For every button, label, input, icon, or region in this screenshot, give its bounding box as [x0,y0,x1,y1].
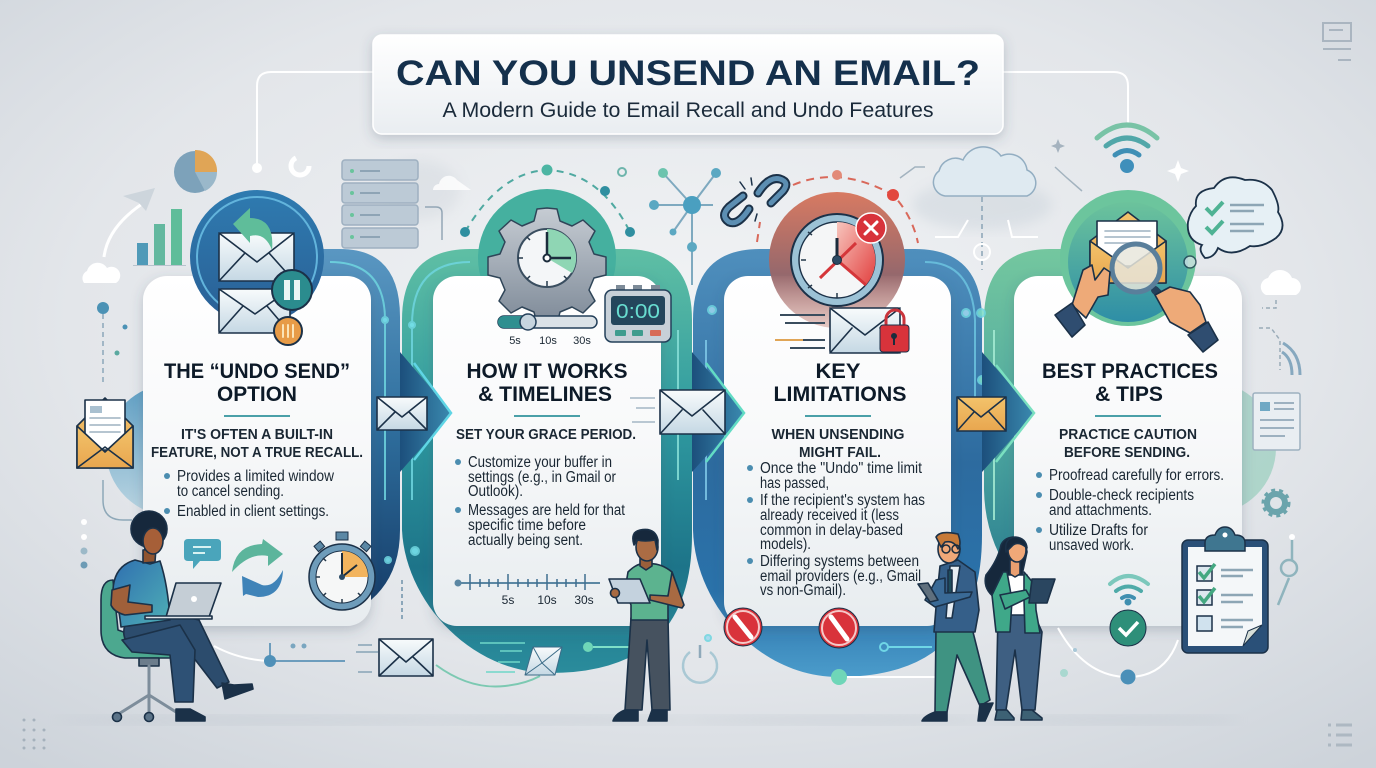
bullets card 2: Customize your buffer in [468,454,612,471]
bullets card 2 [455,454,626,549]
divider [805,415,871,417]
bullets card 4: Double-check recipients [1049,487,1194,504]
icon: dashed red arc [757,170,918,243]
icon circle: timeline gear backdrop [478,189,616,327]
bullets card 1: Provides a limited window [177,468,335,485]
subheading card 1: IT'S OFTEN A BUILT-IN [181,427,333,443]
panel: card 3 key limitations [724,276,951,626]
bullets card 3: email providers (e.g., Gmail [760,568,921,585]
arm [925,578,972,607]
timeline ruler: 10s [537,593,557,607]
decor: side wifi [1282,343,1300,375]
ribbon 2 [402,249,692,673]
decor: swirl ring [291,157,309,175]
person: seated with laptop [101,511,253,722]
person: standing with tablet [609,529,684,721]
subtitle: A Modern Guide to Email Recall and Undo Features [442,99,934,122]
decor: small cloud and bracket [425,176,471,240]
arm [650,572,684,608]
decor: right cloud [1259,270,1301,370]
head [938,535,960,563]
heading: how it works: & TIMELINES [478,383,612,406]
decor: power ring [683,645,717,683]
bullets card 2: settings (e.g., in Gmail or [468,469,616,486]
decor: wifi top right [1097,125,1157,173]
ribbon 1 [300,249,400,600]
bullets card 4: unsaved work. [1049,537,1134,554]
icon: stop sign center [819,608,859,648]
icon: digital timer: 0:00 [616,301,660,323]
decor: rocket with trail [104,188,155,257]
icon: clock with x [791,213,886,306]
timeline ruler: 5s [502,593,514,607]
divider [1095,415,1161,417]
icon: envelope under magnifier [1090,212,1175,310]
shoes [995,710,1042,720]
shoes [176,709,205,721]
title box [373,35,1003,134]
decor: bar chart [133,209,186,266]
tablet [609,579,650,603]
decor: node line right [1278,534,1297,605]
timeline ruler [454,574,600,607]
arrow 1 [400,352,452,472]
subheading card 4: PRACTICE CAUTION [1059,427,1197,443]
ground shadows [55,715,1240,725]
bullets card 3: Once the "Undo" time limit [760,460,923,477]
decor: cloud left [82,263,120,283]
neck [640,555,652,570]
icon: clipboard checklist [1182,527,1268,653]
icon: slider: 10s [539,335,557,347]
decor: cloud with pulse [900,147,1082,270]
decor: sparkles [1051,139,1189,182]
bullets card 4: and attachments. [1049,502,1152,519]
shirt and tie [946,566,960,618]
heading: key limitations: LIMITATIONS [774,383,906,406]
face [143,528,163,554]
person: man with phone [918,533,993,721]
ribbon: left halo [106,384,238,516]
divider [224,415,290,417]
connector lines from title [253,72,1128,172]
jacket [934,560,979,632]
jacket [992,572,1040,633]
icon: sync arrows [232,539,283,597]
decor: pie chart [174,150,217,193]
pants with walking leg [935,628,990,712]
icon: chat bubble [184,539,221,569]
arrow 3 [982,352,1035,472]
bullets card 1: to cancel sending. [177,483,284,500]
divider [514,415,580,417]
dashed line between cards [401,580,403,620]
icon: open envelope with document [77,398,133,468]
decor: left dots [80,519,88,568]
torso [113,560,170,627]
pants [996,614,1042,710]
face [1008,538,1026,562]
hair [131,511,167,547]
bullets card 1: Enabled in client settings. [177,503,329,520]
hair [633,529,658,550]
white top [1005,575,1027,615]
arm [111,585,152,615]
icon: slider: 30s [573,335,591,347]
subheading card 3: MIGHT FAIL. [799,445,881,461]
icon: slider: 5s [509,335,521,347]
bullets card 3 [747,460,925,599]
subheading card 4: BEFORE SENDING. [1064,445,1190,461]
bottom node card 4 [1060,648,1136,684]
panel: card 1 undo send [143,276,371,626]
arm [1000,590,1030,609]
heading: how it works [466,360,628,406]
icon circle: limitations [769,192,905,328]
face [636,533,658,561]
bullets card 3: already received it (less [760,507,899,524]
bullets card 1 [164,468,335,520]
icon: thought bubble with checks [1184,177,1283,268]
icon: flow envelope 1 [377,397,427,430]
icon: wifi card 4 [1110,576,1148,606]
bullets card 3: If the recipient's system has [760,492,925,509]
icon: left hand [1055,265,1110,337]
hair back [985,537,1027,600]
subheading card 3: WHEN UNSENDING [772,427,904,443]
glasses [942,545,960,553]
decor: halo bracket [103,480,132,520]
timeline ruler: 30s [574,593,594,607]
bottom flow: card 3 nodes [831,643,932,685]
icon: broken chain [724,178,786,223]
front leg [122,625,195,702]
subheading card 1: FEATURE, NOT A TRUE RECALL. [151,445,363,461]
bullets card 3: Differing systems between [760,553,919,570]
neck [1010,560,1020,577]
icon: flow envelope 3 orange [957,397,1006,431]
decor: right document [1253,393,1300,450]
ribbon 4 [984,249,1110,578]
background soft blobs [380,160,1052,230]
laptop [145,583,221,619]
icon: flow envelope 2 [630,390,725,434]
heading: key limitations [774,360,906,406]
decor: list bottom right [1328,725,1352,745]
decor: stacked bars icon top right [1323,23,1351,60]
icon: gear clock [488,208,606,324]
panel: card 4 best practices [1014,276,1242,626]
icon circle: best practices [1060,190,1196,326]
heading: best practices [1042,360,1218,406]
bullets card 4: Utilize Drafts for [1049,522,1148,539]
ribbon 3 [693,249,982,677]
bullets card 3: has passed, [760,475,829,492]
icon circle: undo send [190,190,324,324]
ribbon: right halo [1144,382,1276,514]
heading: key limitations: KEY [816,360,860,383]
shoes [922,703,993,721]
heading: the undo send option: THE “UNDO SEND” [164,360,350,383]
heading: the undo send option: OPTION [217,383,297,406]
icon: right hand [1155,287,1218,352]
bullets card 3: common in delay-based [760,522,903,539]
back leg [124,617,229,688]
hair top [1006,537,1027,552]
icon: flying small envelope [480,643,562,675]
icon: locked envelope [775,308,909,353]
subheading card 3 [772,427,904,461]
icon: undo envelopes [219,208,312,345]
title: CAN YOU UNSEND AN EMAIL? [396,54,980,93]
icon: stop sign left [724,608,762,646]
decor: server stack [342,160,418,248]
heading: how it works: HOW IT WORKS [466,360,628,383]
bottom flow: teal node [583,642,630,652]
bullets card 2: Messages are held for that [468,502,626,519]
decor: gear right [1263,490,1289,516]
bottom flow: node line [264,643,345,667]
hair [936,533,960,549]
subheading card 1 [151,427,363,461]
bullets card 4: Proofread carefully for errors. [1049,467,1224,484]
icon: green check [1110,610,1146,646]
tablet [1029,579,1055,603]
decor: network nodes [649,168,721,285]
icon: bottom envelope [356,639,433,676]
icon: stopwatch [309,532,375,610]
icon: digital timer [605,285,671,342]
heading: best practices: & TIPS [1095,383,1163,406]
bullets card 2: Outlook). [468,483,523,500]
decor: dashed line left [97,302,128,385]
chair [101,580,176,722]
heading: best practices: BEST PRACTICES [1042,360,1218,383]
ribbon circuit highlights [330,262,994,641]
pants [625,618,670,710]
shoes [613,710,667,721]
decor: dot grid bottom left [22,718,46,750]
bullets card 2: specific time before [468,517,586,534]
heading: the undo send option [164,360,350,406]
person: woman with tablet [985,537,1055,720]
bullets card 3: vs non-Gmail). [760,582,846,599]
decor: dashed arc around gear [460,164,635,237]
bullets card 3: models). [760,536,811,553]
torso [625,564,682,620]
neck [143,548,156,563]
bullets card 2: actually being sent. [468,532,583,549]
bottom flow: white curves [214,628,1178,687]
arrow 2 [692,352,745,472]
phone [918,583,938,602]
bullets card 4 [1036,467,1224,554]
panel: card 2 how it works [433,276,661,626]
icon: slider [498,314,597,347]
subheading card 4 [1059,427,1197,461]
subheading card 2: SET YOUR GRACE PERIOD. [456,427,636,443]
